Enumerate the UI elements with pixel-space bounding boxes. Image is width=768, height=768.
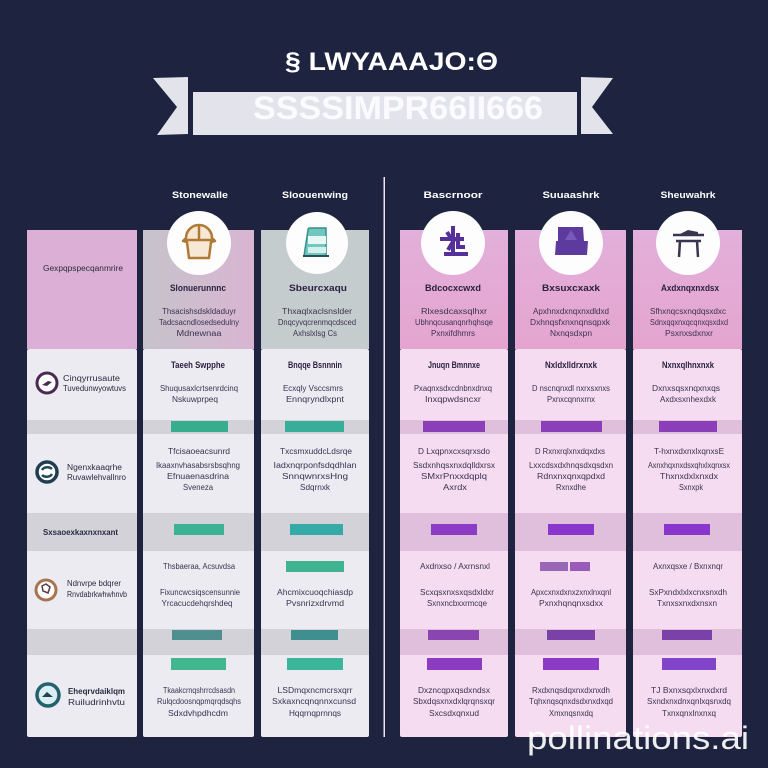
panel: column 4: Bxsuxcxaxk <box>542 283 601 293</box>
panel: column 1: Sveneza <box>183 483 214 492</box>
panel: column 5: Axdxnqxnxdsx <box>661 283 719 293</box>
label column header <box>27 230 137 349</box>
center divider <box>384 177 385 737</box>
icon: column 4 badge <box>539 211 603 275</box>
panel: column 3: Axrdx <box>443 483 467 492</box>
panel: column 3: Ssdxnhqsxnxdqlldxrsx <box>413 461 495 470</box>
panel: column 5: TJ Bxnxsqxlxnxdxrd <box>651 686 727 695</box>
panel: column 2: Dnqcyvqcrenmqcdsced <box>278 318 356 327</box>
column headings <box>172 190 717 200</box>
panel: column 4: Dxhnqsfxnxnqnsqpxk <box>530 318 611 327</box>
panel: column 1: Efnuaenasdrina <box>167 472 230 481</box>
panel: column 3: Sxnxncbxxrmcqe <box>427 599 488 608</box>
panel: column 1: Thsbaeraa, Acsuvdsa <box>163 562 236 571</box>
ribbon right tail <box>581 77 613 134</box>
panel: column 4: Lxxcdsxdxhnqsdxqsdxn <box>529 461 613 470</box>
panel: column 3: Sbxdqsxnxdxlqrqnsxqr <box>413 697 495 706</box>
panel: column 4: Apxcxnxdxnxzxnxlnxqnl <box>531 588 611 597</box>
panel: row labels <box>27 230 137 737</box>
panel: column 2: Sbeurcxaqu <box>289 283 347 293</box>
panel: column 1: Tadcsacndlosedsedulny <box>159 318 239 327</box>
icon: column 5 badge <box>656 211 720 275</box>
panel: row labels: Sxsaoexkaxnxnxant <box>43 528 118 537</box>
panel: column 2: Bnqqe Bsnnnin <box>288 360 342 370</box>
panel: column 4: Tqhxnqsqnxdsdxnxdxqd <box>529 697 613 706</box>
panel: column 3 <box>400 230 508 737</box>
panel: column 5: Psxnxsdxnxr <box>665 329 713 338</box>
panel: column 2: Ahcmixcuoqchiasdp <box>277 588 354 597</box>
panel: column 5 <box>633 230 742 737</box>
panel: column 5: Sfhxnqcsxnqdqsxdxc <box>650 307 726 316</box>
row 2 label line 2: Ruvawlehvallnro <box>67 473 127 482</box>
icon: row 3 <box>36 580 56 600</box>
panel: column 1: Rulqcdoosnqpmqrqdsqhs <box>157 697 241 706</box>
panel: column 1: Yrcacucdehqrshdeq <box>162 599 232 608</box>
panel: column 2: Ennqryndlxpnt <box>286 395 345 404</box>
panel: column 5: Axdxsxnhexdxk <box>660 395 717 404</box>
panel: column 2: Thxaqlxaclsnslder <box>282 307 352 316</box>
panel: column 1: Shuqusaxlcrtsenrdcinq <box>160 384 238 393</box>
panel: column 3: SMxrPnxxdqplq <box>421 472 487 481</box>
ribbon text: SSSSIMPR66II666 <box>253 90 543 126</box>
panel: column 5: Sxndxnxdnxqnlxqsnxdq <box>647 697 731 706</box>
panel: column 4: D Rxnxrqlxnxdqxdxs <box>535 447 605 456</box>
panel: column 2: Sxkaxncqnqnnxcunsd <box>272 697 356 706</box>
panel: column 5: T-hxnxdxnxlxqnxsE <box>654 447 724 456</box>
panel: column 5: Thxnxdxlxnxdx <box>660 472 718 481</box>
icon: column 3 badge <box>421 211 485 275</box>
icon: row 1 <box>37 373 57 393</box>
panel: column 3: Axdnxso / Axrnsnxl <box>420 562 490 571</box>
ribbon left tail <box>153 77 188 135</box>
panel: column 2: TxcsmxuddcLdsrqe <box>280 447 353 456</box>
panel: column 2: Axhslxlsg Cs <box>293 329 337 338</box>
row 1 label: Cinqyrrusaute <box>63 374 121 383</box>
row 2 label: Ngenxkaaqrhe <box>67 463 123 472</box>
panel: column 1: Sdxdvhpdhcdm <box>168 709 228 718</box>
panel: column 3: Ubhnqcusanqnrhqhsqe <box>415 318 494 327</box>
icon: row 4 <box>37 684 59 706</box>
panel: column 5: Txnxsxnxdxnsxn <box>657 599 717 608</box>
column headings: Stonewalle <box>172 190 228 200</box>
icon: column 2 badge <box>286 212 348 274</box>
panel: column 5: Txnxqnxlnxnxq <box>662 709 716 718</box>
panel: column 5: Axnxqsxe / Bxnxnqr <box>653 562 723 571</box>
panel: column 2 <box>261 230 369 737</box>
panel: column 5: SxPxndxlxlxcnxsnxdh <box>649 588 727 597</box>
panel: column 1: Tfcisaoeacsunrd <box>168 447 230 456</box>
row 3 label: Ndnvrpe bdqrer <box>67 579 121 588</box>
panel: column 5: Nxnxqlhnxnxk <box>662 360 715 370</box>
panel: column 2: SnnqwnrxsHng <box>282 472 348 481</box>
panel: column 4: Rxdxnqsdqxnxdxnxdh <box>532 686 610 695</box>
panel: column 4: Nxnqsdxpn <box>550 329 592 338</box>
panel: column 2: Iadxnqrponfsdqdhlan <box>274 461 356 470</box>
panel: column 2: Ecxqly Vsccsmrs <box>283 384 343 393</box>
row 4 label: Eheqrvdaiklqm <box>68 687 125 696</box>
panel: column 1: Slonuerunnnc <box>170 283 226 293</box>
column headings: Bascrnoor <box>424 190 483 200</box>
panel: column 4: Rxnxdhe <box>556 483 587 492</box>
watermark: pollinations.ai <box>527 720 749 756</box>
panel: column 1: Nskuwprpeq <box>172 395 218 404</box>
panel: column 3: Rlxesdcaxsqlhxr <box>421 307 487 316</box>
panel: column 1: Fixuncwcsiqscensunnie <box>160 588 241 597</box>
icon: row 2 <box>37 462 57 482</box>
panel: column 1: Thsacishsdskldaduyr <box>162 307 236 316</box>
panel: column 3: Jnuqn Bmnnxe <box>428 360 480 370</box>
panel: column 2: Pvsnrizxdrvmd <box>286 599 344 608</box>
column headings: Sloouenwing <box>282 190 348 200</box>
panel: column 3: Sxcsdxqnxud <box>429 709 479 718</box>
column headings: Suuaashrk <box>542 190 601 200</box>
row 3 label line 2: Rnvdabrkwhwhnvb <box>67 590 127 599</box>
title: § LWYAAAJO:Θ <box>285 48 498 76</box>
panel: column 4: Nxldxlldrxnxk <box>545 360 598 370</box>
panel: column 4: Xmxnqsnxdq <box>549 709 593 718</box>
panel: column 4: Rdnxnxqnxqpdxd <box>537 472 605 481</box>
panel: column 5: Sdnxqqxnxqcqnxqsxdxd <box>650 318 728 327</box>
panel: column 5: Axnxhqxnxdsxqhxlxqnxsx <box>648 461 730 470</box>
panel: column 4: Pxnxcqnnxrnx <box>547 395 595 404</box>
row 4 label line 2: Ruiludrinhvtu <box>68 698 125 707</box>
column headings: Sheuwahrk <box>660 190 717 200</box>
panel: column 3: Scxqsxnxsxqsdxldxr <box>420 588 494 597</box>
panel: column 2: Hqqrnqprnnqs <box>289 709 341 718</box>
panel: column 2: Sdqrnxk <box>300 483 331 492</box>
panel: column 1: Ikaaxnvhasabsrsbsqhng <box>156 461 240 470</box>
icon: column 1 badge <box>167 211 231 275</box>
panel: column 1: Tkaakcrnqshrrcdsasdn <box>163 686 235 695</box>
panel: column 2: LSDmqxncmcrsxqrr <box>278 686 353 695</box>
panel: column 4: Pxnxhqnqnxsdxx <box>539 599 603 608</box>
panel: column 5: Sxnxpk <box>679 483 704 492</box>
panel: column 1: Taeeh Swpphe <box>171 360 225 370</box>
panel: column 3: Inxqpwdsncxr <box>425 395 481 404</box>
ribbon body <box>193 92 577 135</box>
panel: column 3: Pxaqnxsdxcdnbnxdnxq <box>414 384 492 393</box>
panel: column 4: Apxhnxdxnqxnxdldxd <box>533 307 609 316</box>
panel: column 3: Pxnxifdhmrs <box>431 329 475 338</box>
panel: column 1: Mdnewnaa <box>176 329 222 338</box>
row 1 label line 2: Tuvedunwyowtuvs <box>63 384 126 393</box>
panel: column 3: Dxzncqpxqsdxndsx <box>418 686 490 695</box>
panel: column 1 <box>143 230 254 737</box>
panel: column 4: D nscnqnxdl nxrxsxnxs <box>532 384 610 393</box>
panel: column 4 <box>515 230 626 737</box>
panel: column 3: Bdcocxcwxd <box>425 283 481 293</box>
panel: column 3: D Lxqpnxcxsqrxsdo <box>418 447 491 456</box>
panel: column 5: Dxnxsqsxnqxnxqs <box>652 384 720 393</box>
ribbon banner <box>153 77 613 135</box>
panel: row labels: Gexpqpspecqanmrire <box>43 264 124 273</box>
